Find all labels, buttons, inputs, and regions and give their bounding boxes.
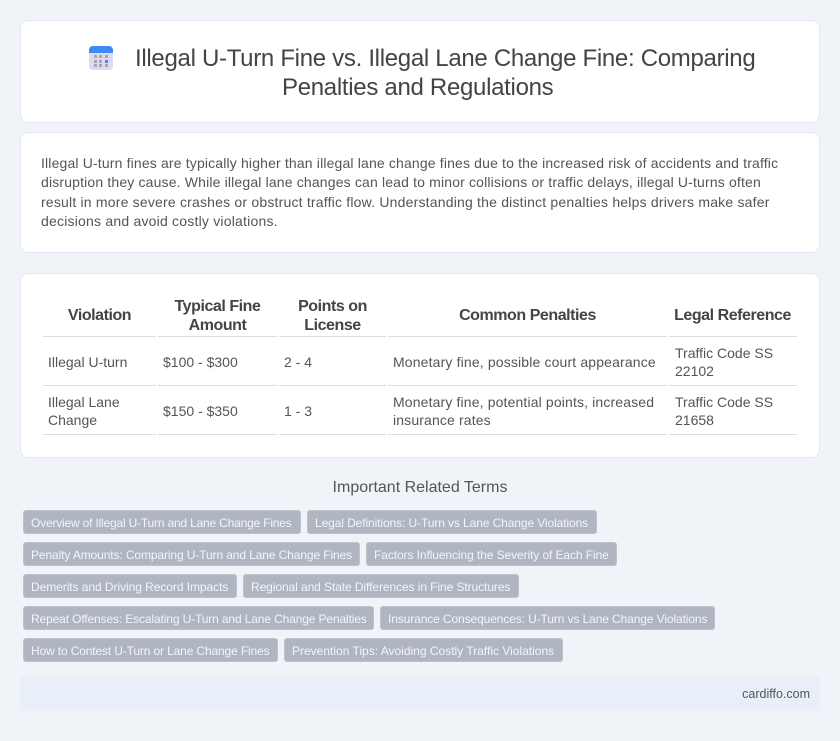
tag bbox=[23, 606, 374, 630]
tag: How to Contest U-Turn or Lane Change Fines bbox=[31, 644, 269, 658]
reference u-turn bbox=[675, 345, 773, 379]
title bbox=[135, 45, 755, 101]
intro text: result in more severe crashes or obstruct traffic flow. Understanding the distinct penalties helps drivers make safer bbox=[41, 194, 770, 210]
tag bbox=[243, 574, 519, 598]
table header: fine: Typical Fine bbox=[175, 298, 260, 315]
tag bbox=[23, 510, 301, 534]
intro text: disruption they cause. While illegal lane changes can lead to minor collisions or traffic delays, illegal U-turns often bbox=[41, 174, 761, 190]
intro text bbox=[41, 155, 778, 229]
penalties lane change: insurance rates bbox=[393, 412, 491, 428]
tag: Repeat Offenses: Escalating U-Turn and Lane Change Penalties bbox=[31, 612, 367, 626]
intro text: decisions and avoid costly violations. bbox=[41, 213, 278, 229]
tag bbox=[23, 574, 237, 598]
tag: Demerits and Driving Record Impacts bbox=[31, 580, 228, 594]
panel: comparison table bbox=[20, 273, 820, 458]
reference lane change bbox=[675, 394, 773, 428]
tag: Prevention Tips: Avoiding Costly Traffic Violations bbox=[292, 644, 554, 658]
icon: calendar bbox=[89, 46, 113, 70]
reference lane change: 21658 bbox=[675, 412, 714, 428]
penalties lane change bbox=[393, 394, 654, 428]
tag bbox=[23, 638, 278, 662]
intro text: Illegal U-turn fines are typically higher than illegal lane change fines due to the increased risk of accidents and traffic bbox=[41, 155, 778, 171]
tag: Penalty Amounts: Comparing U-Turn and Lane Change Fines bbox=[31, 548, 352, 562]
reference u-turn: Traffic Code SS bbox=[675, 345, 773, 361]
penalties lane change: Monetary fine, potential points, increased bbox=[393, 394, 654, 410]
reference u-turn: 22102 bbox=[675, 363, 714, 379]
table header: points bbox=[298, 298, 367, 334]
row: illegal lane change: Illegal Lane bbox=[48, 394, 120, 410]
fine lane change: $150 - $350 bbox=[163, 403, 238, 419]
table header: penalties: Common Penalties bbox=[459, 307, 596, 324]
tag: Overview of Illegal U-Turn and Lane Change Fines bbox=[31, 516, 292, 530]
tag bbox=[366, 542, 617, 566]
table header: fine bbox=[174, 298, 260, 334]
row: illegal u-turn: Illegal U-turn bbox=[48, 354, 127, 370]
tags: related terms bbox=[23, 510, 715, 662]
table header: points: Points on bbox=[298, 298, 367, 315]
row: illegal lane change: Change bbox=[48, 412, 97, 428]
fine u-turn: $100 - $300 bbox=[163, 354, 238, 370]
footer brand: cardiffo.com bbox=[742, 687, 810, 701]
penalties u-turn: Monetary fine, possible court appearance bbox=[393, 354, 656, 370]
table header: fine: Amount bbox=[189, 317, 246, 334]
row: illegal lane change bbox=[48, 394, 120, 428]
table header: points: License bbox=[304, 317, 361, 334]
tag bbox=[284, 638, 563, 662]
header panel bbox=[20, 20, 820, 123]
tag: Legal Definitions: U-Turn vs Lane Change Violations bbox=[315, 516, 588, 530]
tag bbox=[380, 606, 715, 630]
intro panel bbox=[20, 132, 820, 253]
points lane change: 1 - 3 bbox=[284, 403, 312, 419]
title: Penalties and Regulations bbox=[282, 74, 553, 101]
title: Illegal U-Turn Fine vs. Illegal Lane Change Fine: Comparing bbox=[135, 45, 755, 72]
tag bbox=[23, 542, 360, 566]
tag: Regional and State Differences in Fine Structures bbox=[251, 580, 510, 594]
table header: legal reference: Legal Reference bbox=[674, 307, 791, 324]
table header: violation: Violation bbox=[68, 307, 131, 324]
tag bbox=[307, 510, 597, 534]
points u-turn: 2 - 4 bbox=[284, 354, 312, 370]
footer bar bbox=[20, 677, 820, 711]
heading: related terms: Important Related Terms bbox=[333, 479, 507, 496]
tag: Factors Influencing the Severity of Each Fine bbox=[374, 548, 609, 562]
tag: Insurance Consequences: U-Turn vs Lane Change Violations bbox=[388, 612, 707, 626]
reference lane change: Traffic Code SS bbox=[675, 394, 773, 410]
